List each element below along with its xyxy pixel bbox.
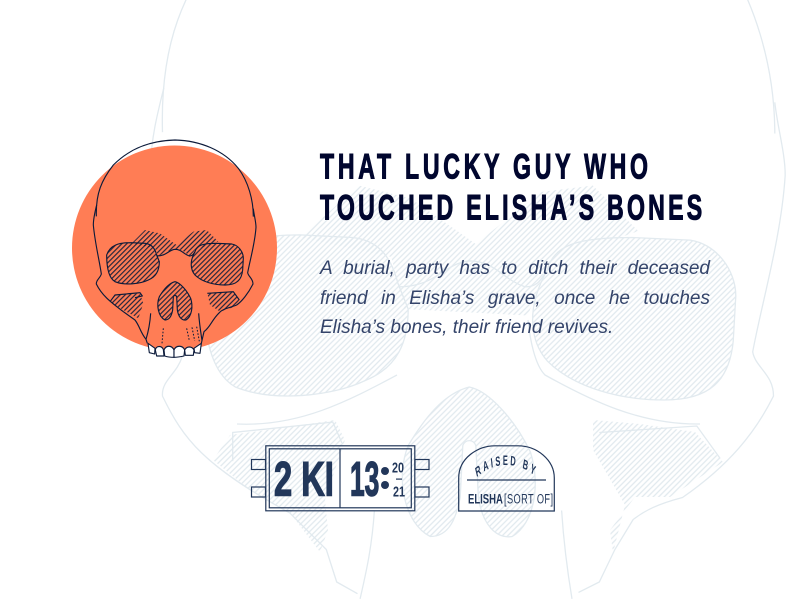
chapter and verse badge: 21 — [393, 483, 405, 500]
orange circle — [72, 146, 277, 350]
small skull with sunglasses — [93, 140, 256, 357]
raised by badge: [SORT OF] — [504, 491, 553, 507]
raised by badge: ELISHA — [468, 491, 503, 507]
title — [320, 148, 702, 228]
raised by badge — [458, 445, 555, 512]
chapter and verse badge: 13 — [350, 453, 379, 507]
chapter and verse badge — [252, 446, 429, 511]
hatching: sunglasses and brow — [107, 230, 243, 320]
title: TOUCHED ELISHA’S BONES — [320, 189, 702, 228]
title: THAT LUCKY GUY WHO — [320, 148, 648, 187]
chapter and verse badge: 2 KI — [274, 452, 334, 506]
raised by badge: RAISED BY — [475, 456, 536, 477]
chapter and verse badge: 20 — [392, 459, 404, 476]
background skull — [151, 0, 785, 599]
body text: Elisha’s bones, their friend revives. — [320, 317, 613, 338]
body text: friend in Elisha’s grave, once he touches — [320, 288, 710, 309]
background cheek hatching — [213, 420, 723, 553]
teeth — [148, 343, 201, 357]
body text: A burial, party has to ditch their deceased — [320, 258, 710, 279]
body text — [319, 258, 710, 338]
